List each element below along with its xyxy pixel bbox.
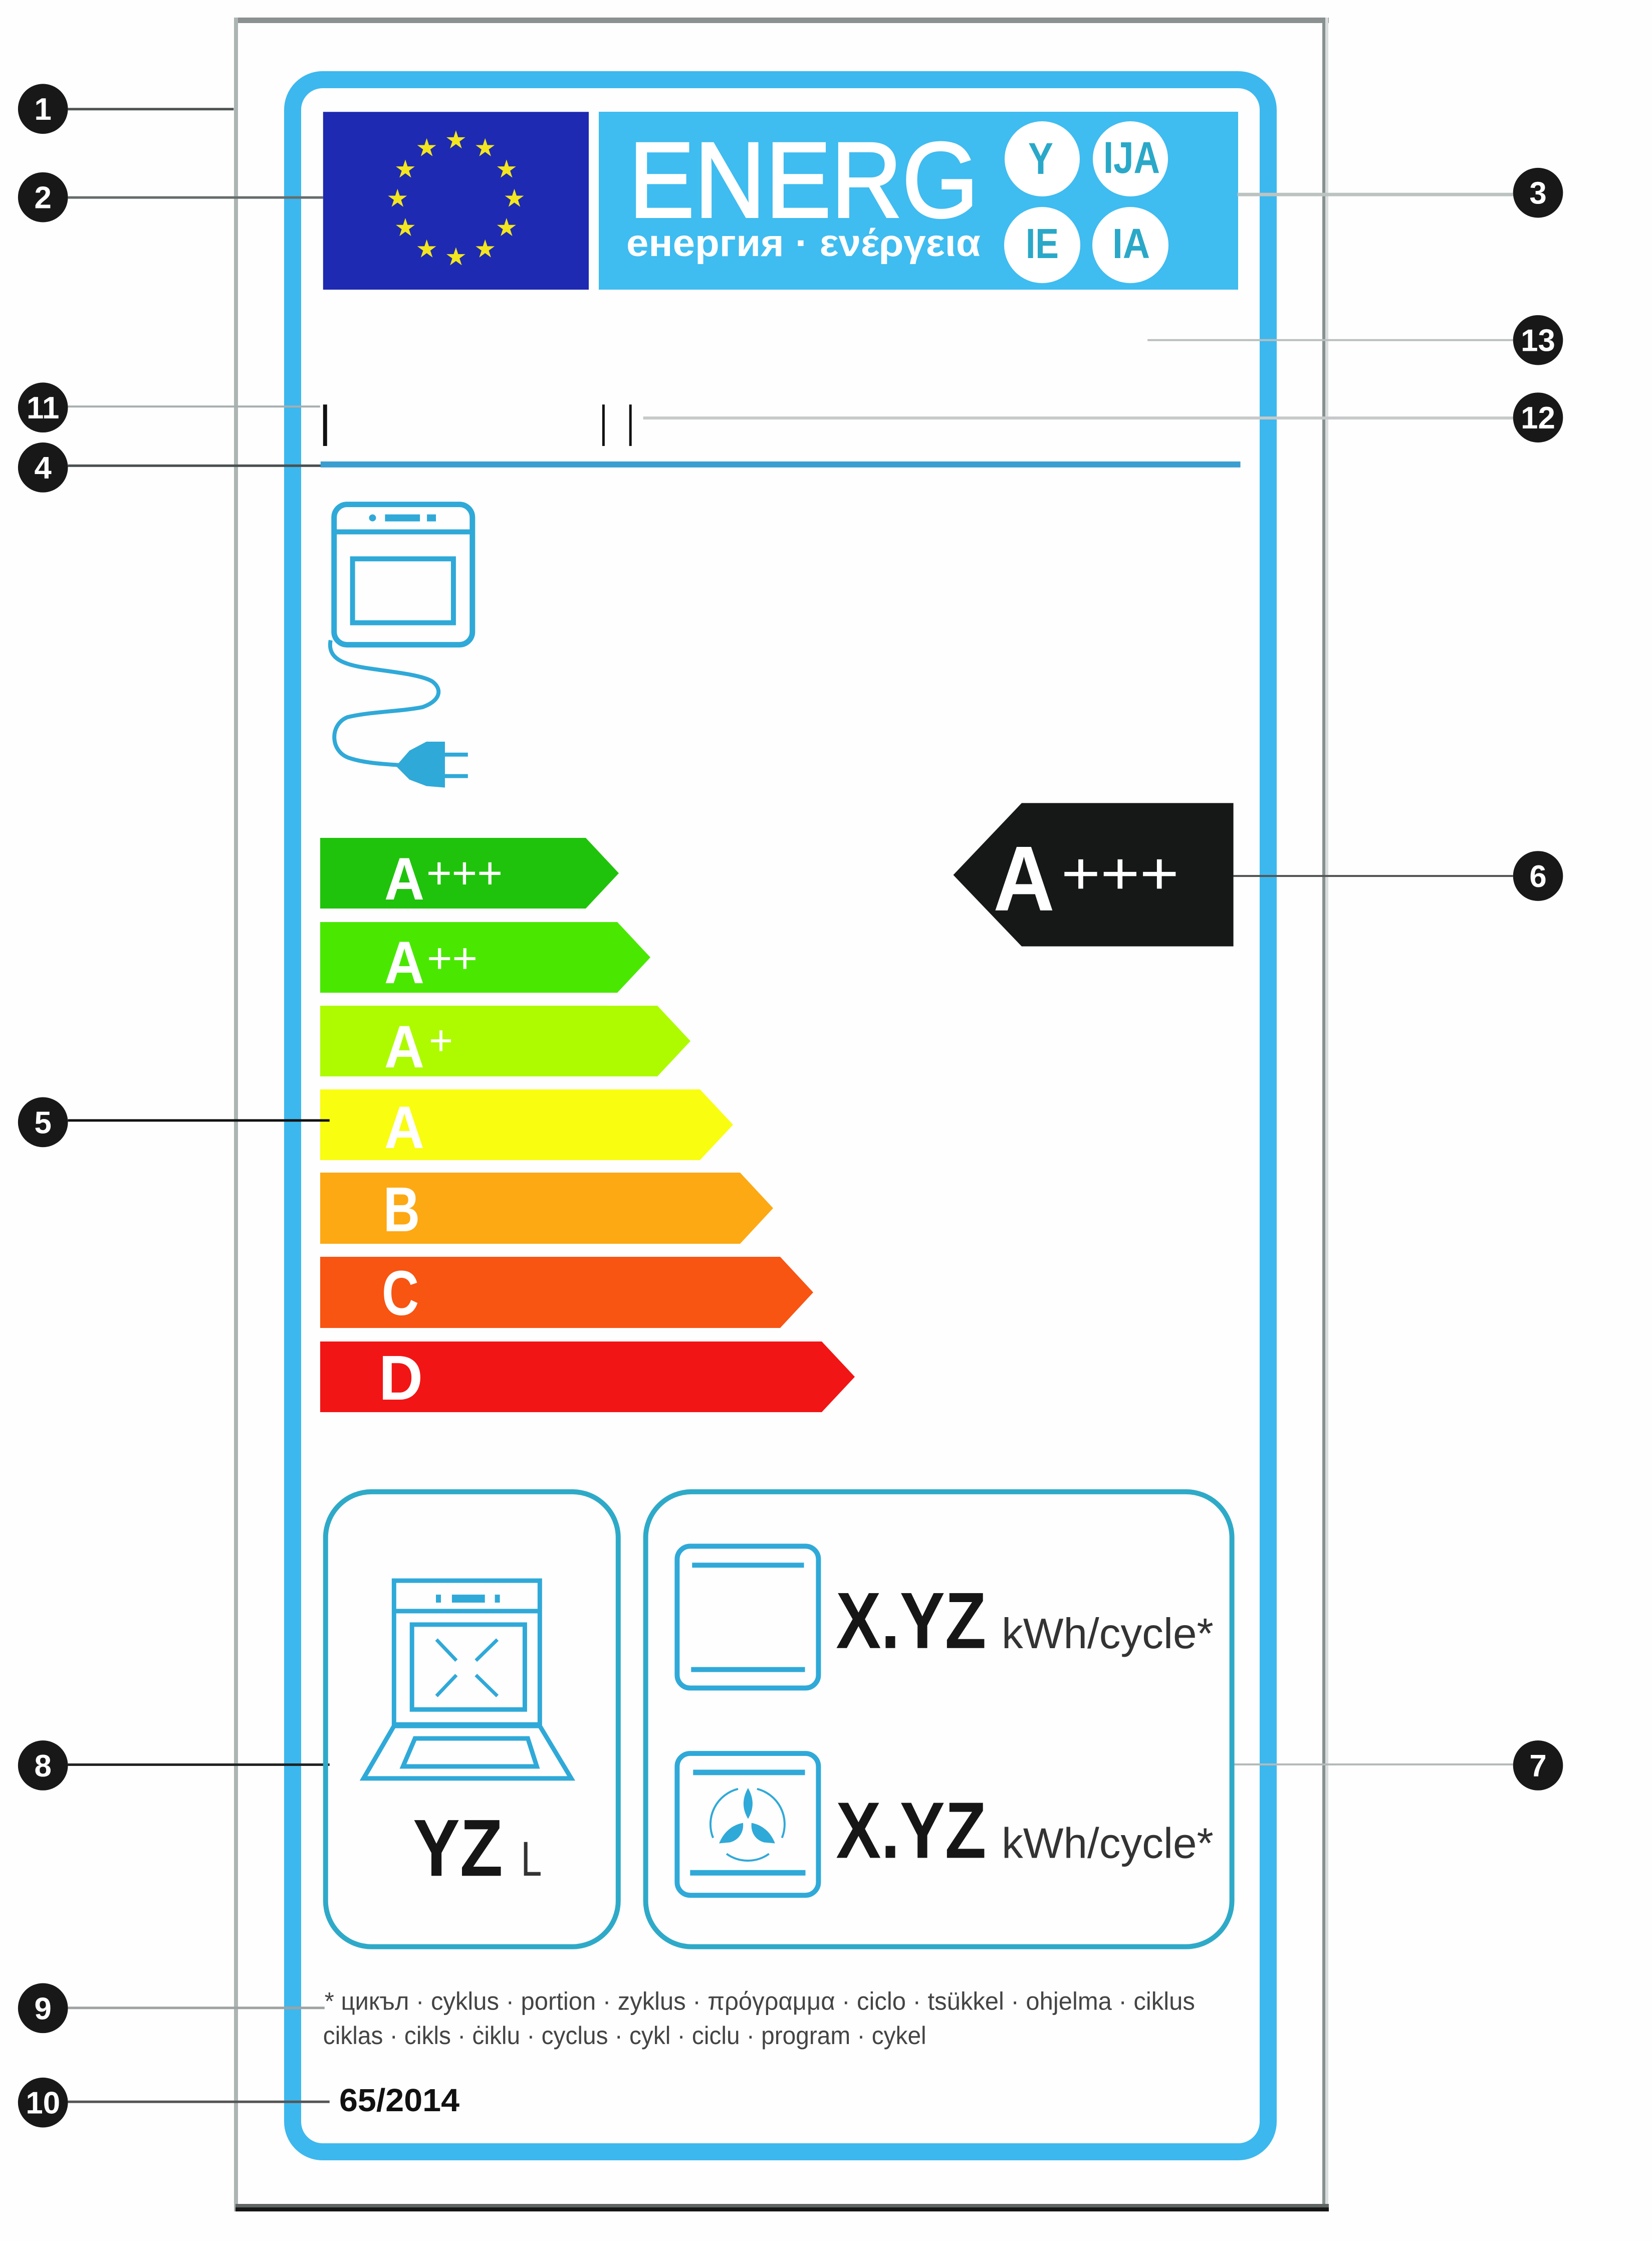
ENERG heading: ENERG xyxy=(629,120,979,240)
supplier name and model marks xyxy=(323,404,632,446)
arrow C: C xyxy=(382,1258,419,1328)
icon: fan-forced heating xyxy=(677,1753,818,1895)
language suffix circles: Y xyxy=(1028,133,1053,183)
badge 1 xyxy=(18,84,68,134)
badge 8 xyxy=(18,1740,68,1790)
arrow A+++ xyxy=(320,838,619,913)
language suffix circles: IJA xyxy=(1103,132,1160,182)
arrow A: A xyxy=(384,1094,424,1161)
arrow A++: ++ xyxy=(427,935,478,982)
icon: oven with door open xyxy=(364,1581,571,1778)
badge 3 xyxy=(1513,168,1563,218)
arrow D xyxy=(320,1341,855,1413)
energy scale arrows xyxy=(320,838,855,1413)
badge 2: 2 xyxy=(35,181,52,215)
energy banner xyxy=(599,112,1238,290)
badge 4 xyxy=(18,442,68,493)
icon: oven with plug xyxy=(330,505,473,788)
badge 8: 8 xyxy=(35,1749,52,1783)
arrow A+++: +++ xyxy=(426,848,503,899)
icon: conventional heating xyxy=(677,1546,818,1688)
badge 7: 7 xyxy=(1529,1749,1547,1783)
badge 9 xyxy=(18,1983,68,2033)
panel: oven volume xyxy=(326,1492,618,1947)
arrow A+: + xyxy=(429,1017,453,1064)
blue rounded label border xyxy=(293,80,1268,2152)
conventional consumption value: X.YZ xyxy=(836,1576,986,1665)
arrow C xyxy=(320,1257,813,1328)
blue separator line xyxy=(321,462,1241,468)
language suffix circles: IE xyxy=(1026,220,1059,267)
badge 6 xyxy=(1513,851,1563,901)
label page frame xyxy=(234,18,1329,2211)
regulation number: 65/2014 xyxy=(339,2082,459,2118)
EU flag xyxy=(323,112,589,290)
conventional consumption unit: kWh/cycle* xyxy=(1002,1610,1214,1658)
badge 11: 11 xyxy=(27,391,59,425)
badge 6: 6 xyxy=(1529,859,1547,894)
callout leader lines xyxy=(68,108,1513,2103)
volume value: YZ xyxy=(413,1803,503,1893)
badge 12: 12 xyxy=(1521,401,1555,435)
panel: energy consumption xyxy=(646,1492,1232,1947)
arrow B xyxy=(320,1173,773,1245)
arrow A+: A xyxy=(384,1013,424,1080)
badge 9: 9 xyxy=(35,1991,52,2026)
badge 7 xyxy=(1513,1740,1563,1790)
rating indicator arrow: +++ xyxy=(1061,840,1179,907)
rating indicator arrow xyxy=(954,803,1234,947)
arrow A xyxy=(320,1089,733,1161)
multilingual energy subtitle: енергия · ενέργεια xyxy=(626,222,981,265)
badge 10 xyxy=(18,2078,68,2128)
rating indicator arrow: A xyxy=(993,827,1055,931)
badge 1: 1 xyxy=(35,92,52,127)
arrow A+++: A xyxy=(384,845,424,913)
badge 10: 10 xyxy=(26,2086,60,2121)
badge 2 xyxy=(18,172,68,222)
arrow A+ xyxy=(320,1006,690,1080)
language suffix circles: IA xyxy=(1112,220,1150,267)
language suffix circles xyxy=(1004,121,1168,283)
badge 5 xyxy=(18,1097,68,1147)
badge 4: 4 xyxy=(35,451,52,486)
volume unit: L xyxy=(521,1832,542,1886)
fan consumption unit: kWh/cycle* xyxy=(1002,1819,1214,1867)
badge 12 xyxy=(1513,392,1563,442)
badge 5: 5 xyxy=(35,1105,52,1140)
footnote: cycle translations xyxy=(323,1987,1195,2050)
arrow D: D xyxy=(379,1342,423,1413)
footnote: cycle translations: * цикъл · cyklus · portion · zyklus · πρόγραμμα · ciclo · tsükkel · ohjelma · ciklus xyxy=(325,1987,1195,2015)
badge 3: 3 xyxy=(1529,176,1547,211)
footnote: cycle translations: ciklas · cikls · ċiklu · cyclus · cykl · ciclu · program · cykel xyxy=(323,2022,926,2050)
arrow B: B xyxy=(383,1174,420,1245)
fan consumption value: X.YZ xyxy=(836,1785,986,1875)
badge 13: 13 xyxy=(1521,324,1555,358)
badge 11 xyxy=(18,382,68,432)
arrow A++ xyxy=(320,922,650,996)
arrow A++: A xyxy=(384,929,424,996)
badge 13 xyxy=(1513,315,1563,365)
